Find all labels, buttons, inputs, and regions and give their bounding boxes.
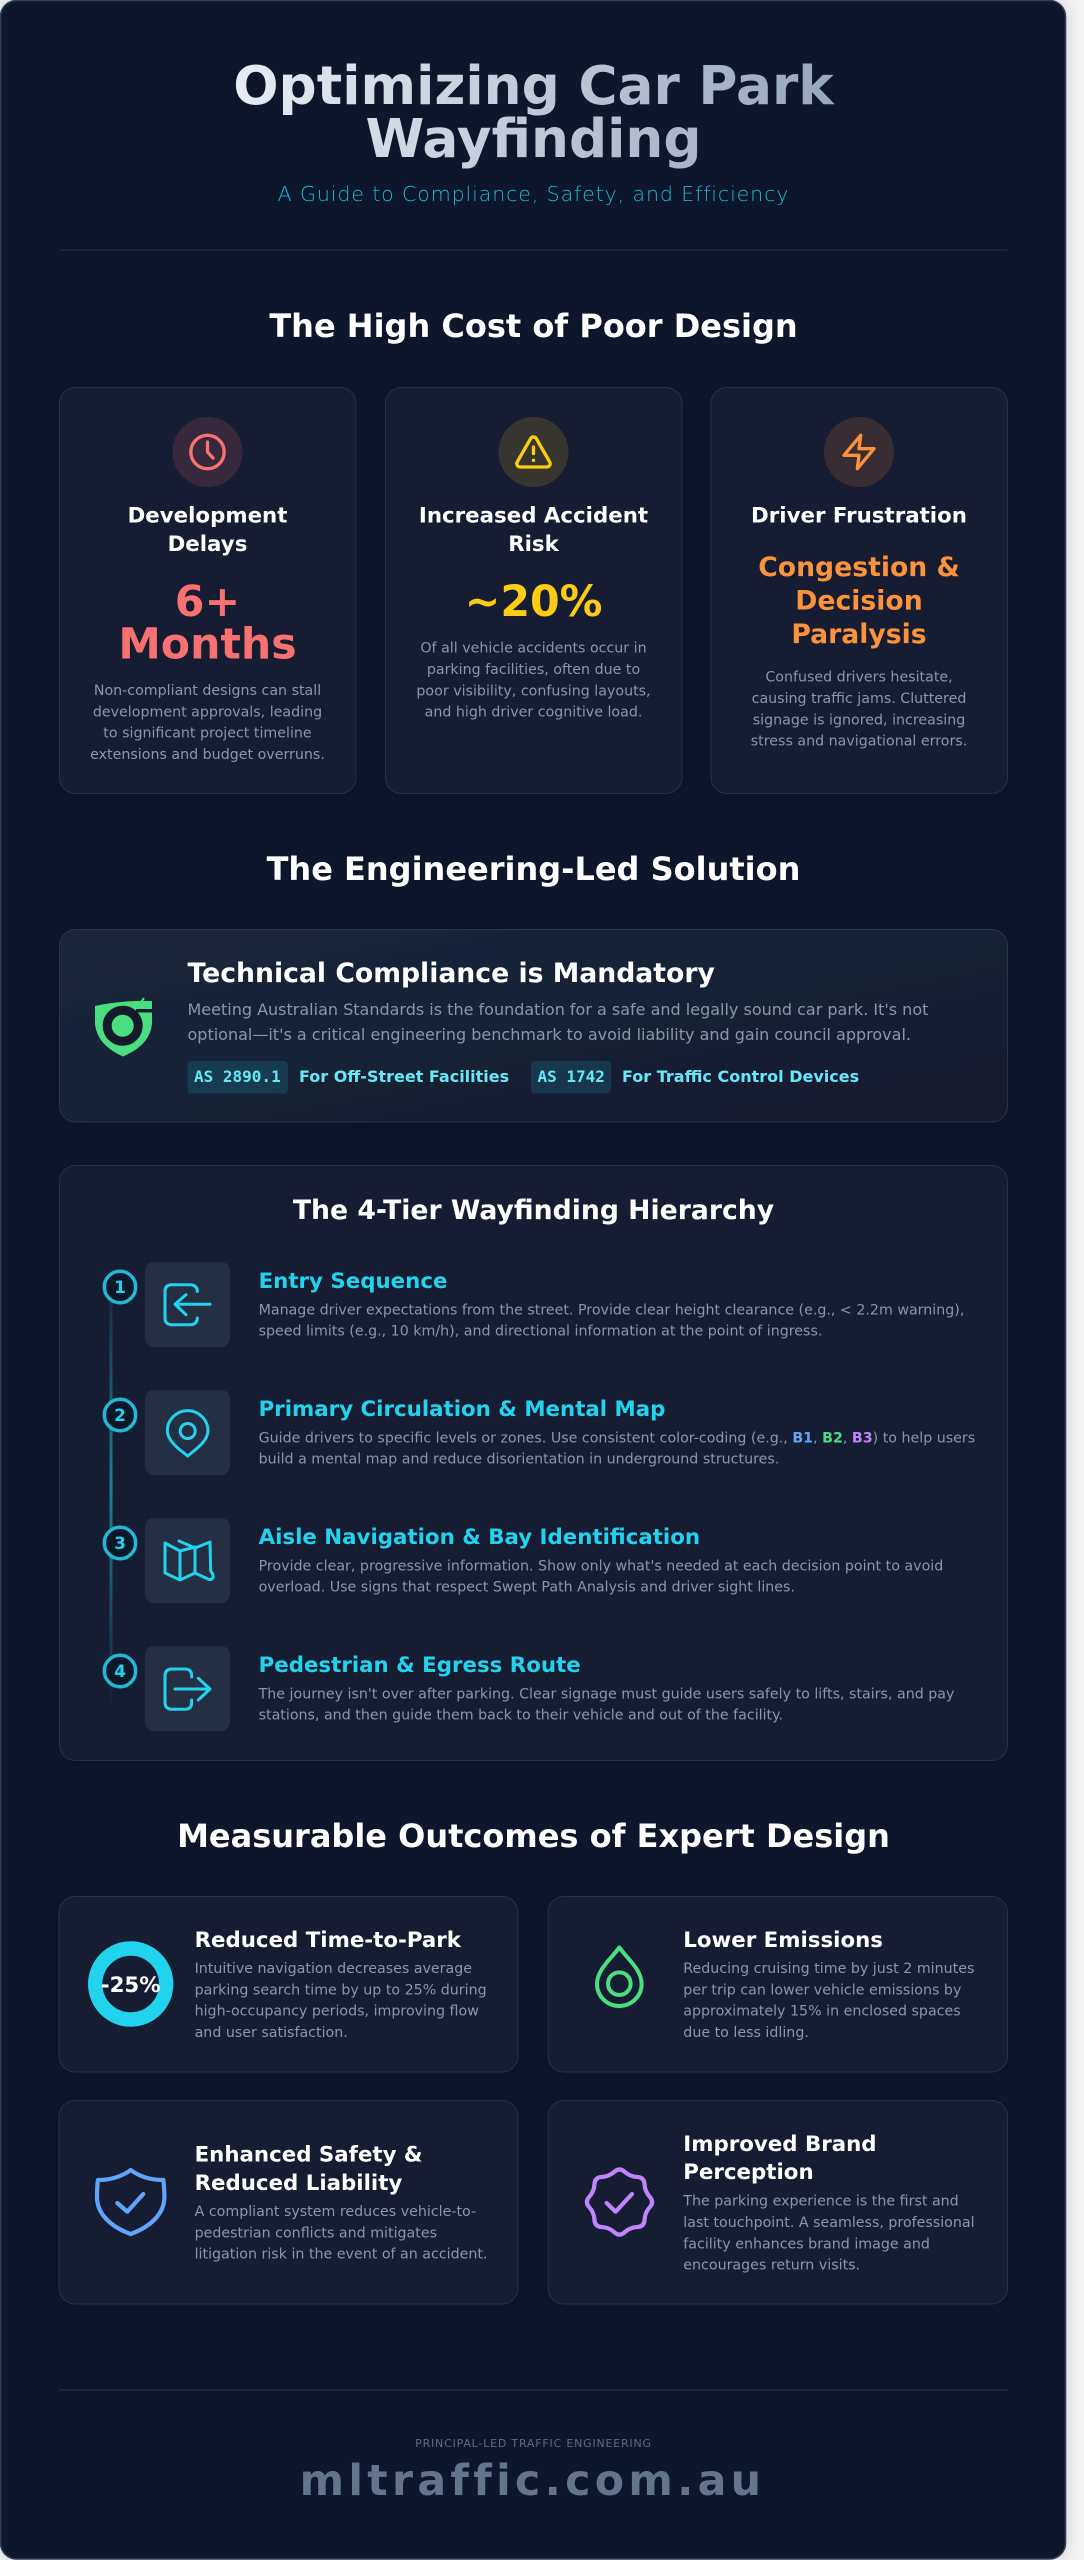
badge: AS 1742 bbox=[531, 1061, 859, 1094]
card text: A compliant system reduces vehicle-to- bbox=[195, 2204, 476, 2220]
card text: last touchpoint. A seamless, professional bbox=[683, 2215, 975, 2231]
description: causing traffic jams. Cluttered bbox=[752, 691, 966, 707]
stat: 6+ months: 6+ bbox=[175, 577, 240, 627]
icon: map pin bbox=[145, 1390, 230, 1475]
tier 3: aisle navigation bbox=[104, 1518, 943, 1603]
card heading bbox=[128, 504, 287, 557]
badge: AS 2890.1 bbox=[188, 1061, 509, 1094]
step text: Pedestrian & Egress Route bbox=[259, 1653, 581, 1678]
panel: lower emissions bbox=[548, 1896, 1008, 2072]
step text: Aisle Navigation & Bay Identification bbox=[259, 1525, 700, 1550]
tier 1: entry sequence bbox=[104, 1262, 964, 1347]
description: signage is ignored, increasing bbox=[753, 712, 965, 728]
badge: AS 1742: AS 1742 bbox=[538, 1067, 605, 1086]
tier 2: primary circulation bbox=[104, 1390, 975, 1475]
number badge 4 bbox=[104, 1655, 136, 1687]
description: stress and navigational errors. bbox=[751, 734, 967, 750]
panel: 4-tier wayfinding hierarchy bbox=[60, 1166, 1008, 1760]
icon: blue shield check bbox=[97, 2170, 164, 2234]
panel heading: The 4-Tier Wayfinding Hierarchy bbox=[293, 1195, 774, 1226]
card text: per trip can lower vehicle emissions by bbox=[683, 1982, 961, 1998]
card heading: Delays bbox=[168, 532, 247, 557]
card text: pedestrian conflicts and mitigates bbox=[195, 2225, 437, 2241]
step text: Guide drivers to specific levels or zones. Use consistent color-coding (e.g., B1, B2, B3) to help users bbox=[259, 1430, 975, 1446]
card text bbox=[195, 1928, 487, 2041]
card text: Improved Brand bbox=[683, 2132, 877, 2157]
panel: increased accident risk bbox=[386, 388, 682, 794]
number badge 2: 2 bbox=[114, 1406, 126, 1426]
stat: 6+ months: Months bbox=[118, 620, 297, 670]
step text bbox=[258, 1653, 954, 1724]
card text: Intuitive navigation decreases average bbox=[195, 1961, 472, 1977]
panel: driver frustration bbox=[711, 388, 1008, 794]
step text: stations, and then guide them back to their vehicle and out of the facility. bbox=[259, 1708, 783, 1724]
footer brand: mltraffic.com.au bbox=[300, 2456, 765, 2506]
icon: clock bbox=[172, 417, 242, 487]
tier 4: pedestrian and egress bbox=[104, 1646, 954, 1731]
badge: AS 2890.1: AS 2890.1 bbox=[194, 1067, 281, 1086]
card heading: Increased Accident bbox=[419, 504, 648, 529]
number badge 4: 4 bbox=[114, 1662, 126, 1682]
description: poor visibility, confusing layouts, bbox=[416, 683, 651, 699]
icon: entry arrow bbox=[145, 1262, 230, 1347]
panel: development delays bbox=[60, 388, 356, 794]
description: parking facilities, often due to bbox=[427, 662, 640, 678]
description bbox=[416, 641, 651, 721]
description bbox=[751, 670, 967, 750]
number badge 3: 3 bbox=[114, 1534, 126, 1554]
card text: Lower Emissions bbox=[683, 1928, 883, 1953]
step text: overload. Use signs that respect Swept Path Analysis and driver sight lines. bbox=[259, 1580, 795, 1596]
panel: reduced time-to-park bbox=[59, 1896, 518, 2072]
description: Confused drivers hesitate, bbox=[765, 670, 953, 686]
icon: green drop bbox=[597, 1948, 642, 2006]
description: and high driver cognitive load. bbox=[425, 705, 642, 721]
number badge 2 bbox=[104, 1399, 136, 1431]
donut: -25%: -25% bbox=[101, 1973, 161, 1998]
stat: ~20%: ~20% bbox=[465, 577, 602, 627]
description: extensions and budget overruns. bbox=[90, 747, 325, 763]
donut: -25% bbox=[95, 1948, 166, 2020]
description: Non-compliant designs can stall bbox=[94, 683, 321, 699]
footer tagline: PRINCIPAL-LED TRAFFIC ENGINEERING bbox=[415, 2437, 652, 2450]
badge: AS 2890.1: For Off-Street Facilities bbox=[299, 1067, 509, 1086]
number badge 3 bbox=[104, 1527, 136, 1559]
description: to significant project timeline bbox=[103, 726, 312, 742]
title: Wayfinding bbox=[365, 107, 702, 170]
step text bbox=[259, 1269, 964, 1340]
stat: congestion and decision paralysis: Paralysis bbox=[791, 619, 927, 650]
heading: measurable outcomes: Measurable Outcomes of Expert Design bbox=[177, 1817, 890, 1855]
step text: The journey isn't over after parking. Clear signage must guide users safely to lifts, stairs, and pay bbox=[258, 1686, 954, 1702]
step text: Entry Sequence bbox=[259, 1269, 447, 1294]
card heading: Technical Compliance is Mandatory bbox=[188, 958, 715, 989]
title: Optimizing Car Park bbox=[233, 54, 835, 117]
panel: improved brand perception bbox=[548, 2100, 1008, 2304]
card text: parking search time by up to 25% during bbox=[195, 1982, 487, 1998]
step text: build a mental map and reduce disorientation in underground structures. bbox=[259, 1452, 779, 1468]
icon: folded map bbox=[145, 1518, 230, 1603]
stat: congestion and decision paralysis: Decision bbox=[795, 586, 923, 616]
number badge 1 bbox=[104, 1271, 136, 1303]
card text: Reduced Time-to-Park bbox=[195, 1928, 462, 1953]
panel: enhanced safety bbox=[59, 2100, 518, 2304]
heading: the high cost of poor design: The High Cost of Poor Design bbox=[269, 307, 798, 345]
description: development approvals, leading bbox=[93, 704, 322, 720]
step text: Primary Circulation & Mental Map bbox=[259, 1397, 665, 1422]
card text bbox=[683, 1928, 974, 2041]
number badge 1: 1 bbox=[114, 1278, 126, 1298]
card text bbox=[682, 2132, 975, 2274]
description bbox=[90, 683, 325, 763]
icon: green shield target bbox=[95, 998, 153, 1056]
step text: Manage driver expectations from the street. Provide clear height clearance (e.g., < 2.2m warning), bbox=[259, 1302, 964, 1318]
icon: purple badge check bbox=[587, 2169, 652, 2235]
description: Meeting Australian Standards is the foundation for a safe and legally sound car park. It's not bbox=[188, 1000, 928, 1019]
card heading bbox=[419, 504, 648, 557]
timeline line bbox=[110, 1270, 112, 1712]
step text bbox=[259, 1525, 943, 1596]
title bbox=[233, 54, 835, 170]
card text: Reduced Liability bbox=[195, 2171, 402, 2196]
stat: 6+ months bbox=[118, 577, 297, 670]
icon: warning triangle bbox=[498, 417, 568, 487]
icon: exit arrow bbox=[145, 1646, 230, 1731]
stat: congestion and decision paralysis bbox=[758, 552, 960, 650]
card heading: Risk bbox=[508, 532, 560, 557]
stat: congestion and decision paralysis: Congestion & bbox=[758, 552, 960, 583]
card text: litigation risk in the event of an accident. bbox=[195, 2247, 487, 2263]
description bbox=[188, 1000, 928, 1044]
step text bbox=[259, 1397, 975, 1468]
card text: Perception bbox=[683, 2160, 814, 2185]
step text: Provide clear, progressive information. Show only what's needed at each decision point to avoid bbox=[259, 1558, 943, 1574]
card text: Reducing cruising time by just 2 minutes bbox=[683, 1961, 974, 1977]
card text: due to less idling. bbox=[683, 2025, 809, 2041]
card text: encourages return visits. bbox=[683, 2258, 860, 2274]
card text: and user satisfaction. bbox=[195, 2025, 348, 2041]
badge: AS 1742: For Traffic Control Devices bbox=[622, 1067, 859, 1086]
card text bbox=[195, 2143, 487, 2263]
card text: Enhanced Safety & bbox=[195, 2143, 423, 2168]
subtitle: A Guide to Compliance, Safety, and Efficiency bbox=[278, 182, 789, 206]
card text: facility enhances brand image and bbox=[683, 2236, 930, 2252]
card heading: Driver Frustration bbox=[751, 504, 967, 529]
card text: high-occupancy periods, improving flow bbox=[195, 2004, 479, 2020]
heading: the engineering-led solution: The Engineering-Led Solution bbox=[267, 850, 800, 888]
card text: The parking experience is the first and bbox=[682, 2194, 959, 2210]
description: optional—it's a critical engineering benchmark to avoid liability and gain council approval. bbox=[188, 1025, 911, 1044]
icon: lightning bolt bbox=[824, 417, 894, 487]
step text: speed limits (e.g., 10 km/h), and directional information at the point of ingress. bbox=[259, 1324, 822, 1340]
card text: approximately 15% in enclosed spaces bbox=[683, 2004, 961, 2020]
description: Of all vehicle accidents occur in bbox=[420, 641, 647, 657]
card heading: Development bbox=[128, 504, 287, 529]
panel: technical compliance bbox=[60, 930, 1008, 1122]
